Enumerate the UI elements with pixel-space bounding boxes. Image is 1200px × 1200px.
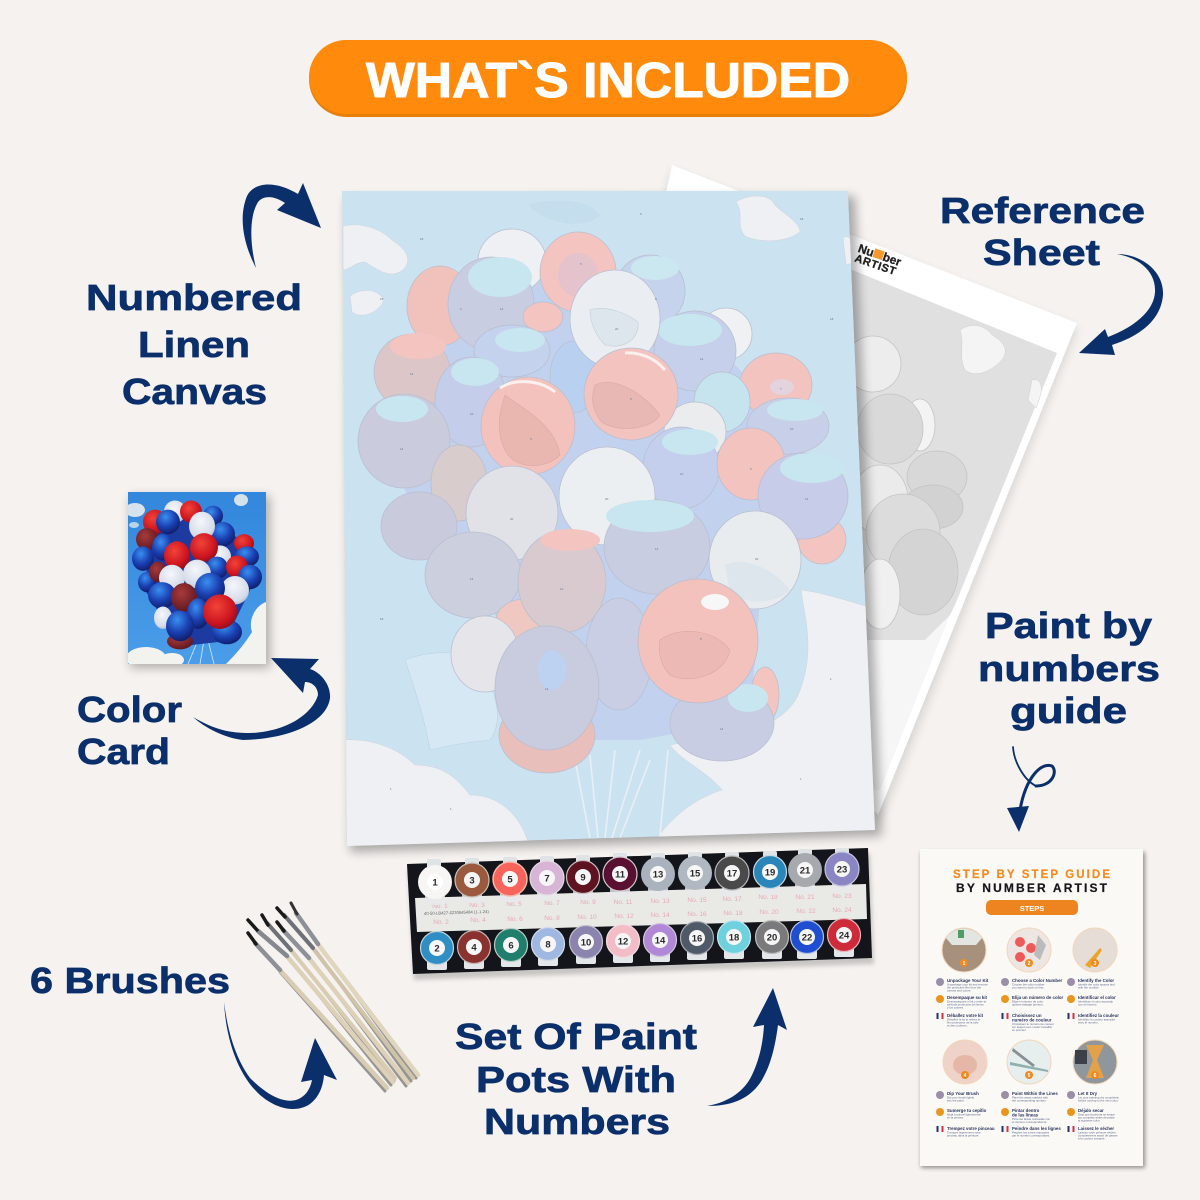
step 3 text: con el número. — [1078, 1002, 1097, 1006]
pot labels: No. 14 — [650, 912, 670, 919]
step 1 text: canvas and colors. — [947, 988, 971, 992]
step 4 text: Dip your brush lightly — [947, 1096, 975, 1100]
sheet logo: ARTIST — [853, 253, 898, 278]
bottom row pots: 12 — [618, 936, 628, 948]
step 5 text: Paint the areas marked with — [1012, 1096, 1048, 1100]
bottom row pots: 4 — [471, 942, 477, 954]
step 4 text — [947, 1091, 995, 1138]
numbered linen canvas — [342, 191, 880, 850]
step 1 text: película protectora del lienzo — [947, 1002, 984, 1006]
step 2 text: you want to work on first. — [1012, 986, 1044, 990]
canvas numbers: 20 — [605, 497, 609, 501]
step 5 text: Peignez les zones marquées — [1012, 1130, 1050, 1134]
pot labels: No. 5 — [506, 901, 522, 908]
canvas numbers: 12 — [410, 372, 414, 376]
brush 3 — [262, 915, 395, 1078]
step 5 text: el número correspondiente. — [1012, 1120, 1047, 1124]
canvas numbers: 18 — [420, 237, 424, 241]
step 5 text: the corresponding number. — [1012, 1098, 1047, 1102]
top row pots: 13 — [653, 870, 663, 880]
label: paint by numbers guide: guide — [1010, 690, 1127, 731]
step 6 text: al siguiente color. — [1078, 1118, 1101, 1122]
step 4 text: into the paint. — [947, 1098, 965, 1102]
canvas numbers: 14 — [805, 497, 809, 501]
step 2 text: Choisissez le numéro de couleur — [1012, 1022, 1054, 1026]
guide poster: BY NUMBER ARTIST — [956, 881, 1108, 895]
sheet logo: ber — [881, 250, 903, 269]
pot labels: No. 1 — [432, 903, 448, 910]
canvas numbers: 6 — [640, 212, 642, 216]
card balloons — [132, 500, 262, 649]
canvas numbers: 14 — [470, 577, 474, 581]
label: numbered linen canvas: Numbered — [86, 277, 302, 318]
step 5 text — [1012, 1091, 1061, 1138]
canvas numbers: 1 — [800, 777, 802, 781]
step 4 text: pinceau dans la peinture. — [947, 1134, 979, 1138]
guide poster: 4 — [964, 1073, 967, 1079]
bottom row pots: 6 — [508, 940, 514, 952]
pot labels: No. 12 — [614, 913, 634, 920]
step 1 text: y los colores. — [947, 1006, 964, 1010]
guide poster: STEPS — [1020, 904, 1044, 913]
pot labels: No. 9 — [580, 899, 596, 906]
canvas numbers: 5 — [750, 467, 752, 471]
bottom row pots — [420, 918, 860, 970]
balloon cluster backing — [404, 280, 798, 740]
bottom row pots: 18 — [729, 932, 739, 944]
step 4 text: Sumerge tu cepillo — [947, 1108, 987, 1113]
step 3 text: Identify the Color — [1078, 978, 1114, 983]
canvas numbers: 14 — [655, 547, 659, 551]
step 4 text: Dip Your Brush — [947, 1091, 979, 1096]
batch code: 40-50-LB427-6230645484 (1-1-24) — [424, 909, 490, 916]
canvas numbers: 12 — [560, 587, 564, 591]
top row pots: 19 — [765, 868, 775, 878]
pot labels: No. 4 — [470, 917, 486, 924]
pot labels: No. 15 — [687, 897, 707, 904]
guide poster — [920, 849, 1145, 1168]
top row pots: 17 — [727, 868, 737, 880]
step 3 text — [1078, 978, 1119, 1024]
canvas numbers: 1 — [390, 787, 392, 791]
guide poster: 6 — [1094, 1073, 1097, 1079]
top row pots: 15 — [690, 868, 701, 880]
step 5 text: Paint Within the Lines — [1012, 1091, 1058, 1096]
step 4 text: Moja tu pincel ligeramente — [947, 1112, 981, 1116]
guide poster: 5 — [1028, 1073, 1031, 1079]
step 6 text — [1078, 1091, 1119, 1140]
pot labels: No. 21 — [795, 894, 815, 901]
canvas numbers: 5 — [580, 262, 582, 266]
canvas numbers: 20 — [510, 517, 514, 521]
top row pots: 1 — [432, 878, 438, 888]
label: paint pots: Set Of Paint — [455, 1016, 697, 1057]
canvas numbers: 1 — [830, 677, 832, 681]
bottom row pots: 20 — [767, 932, 777, 944]
step 6 text: Let your painting dry completely — [1078, 1096, 1119, 1100]
sheet clouds — [960, 325, 1041, 408]
canvas numbers: 10 — [790, 427, 794, 431]
step 2 text — [1012, 978, 1064, 1032]
canvas numbers: 1 — [450, 807, 452, 811]
step 4 text: Trempez légèrement votre — [947, 1130, 981, 1134]
step 6 text: before moving to the next color. — [1078, 1098, 1119, 1102]
canvas numbers: 14 — [400, 447, 404, 451]
pot labels: No. 20 — [759, 909, 779, 916]
step 2 text: en premier. — [1012, 1028, 1027, 1032]
canvas numbers: 10 — [680, 472, 684, 476]
pot labels: No. 18 — [723, 910, 743, 917]
canvas numbers: 20 — [615, 327, 619, 331]
brush 5 — [277, 908, 413, 1078]
label: reference sheet: Sheet — [983, 232, 1100, 273]
canvas numbers: 18 — [830, 317, 834, 321]
step 3 text: with the number. — [1078, 986, 1099, 990]
step 2 text: Choose a Color Number — [1012, 978, 1063, 983]
reference sheet — [600, 165, 1077, 822]
label: paint by numbers guide: numbers — [978, 648, 1160, 689]
canvas numbers: 18 — [800, 217, 804, 221]
top row pots: 21 — [800, 866, 811, 876]
label: brushes: 6 Brushes — [30, 960, 230, 1001]
step 6 text: Déjalo secar — [1078, 1108, 1104, 1113]
step 1 text: Unpackage your kit and remove — [947, 982, 988, 986]
step 5 text: Pinte las áreas marcadas con — [1012, 1117, 1050, 1121]
pot labels: No. 16 — [687, 911, 707, 918]
canvas numbers: 18 — [380, 297, 384, 301]
step 6 text: por completo antes de pasar — [1078, 1116, 1115, 1120]
step 3 text: Identifiez la couleur associée — [1078, 1018, 1116, 1022]
label: numbered linen canvas: Canvas — [122, 371, 267, 412]
canvas numbers: 20 — [755, 557, 759, 561]
step number badges — [960, 959, 1099, 1079]
title banner: WHAT`S INCLUDED — [366, 54, 850, 108]
step 1 text: et des couleurs. — [947, 1024, 968, 1028]
canvas numbers: 18 — [380, 617, 384, 621]
top row pots — [418, 848, 859, 905]
pot labels: No. 6 — [507, 916, 523, 923]
step 2 text: quieres trabajar primero. — [1012, 1002, 1044, 1006]
language flags — [936, 978, 1075, 1133]
sheet logo — [853, 241, 903, 279]
step 6 text: Let It Dry — [1078, 1091, 1098, 1096]
label: paint pots: Pots With — [476, 1059, 676, 1100]
arrow: to brushes — [224, 1002, 337, 1109]
top row pots: 7 — [544, 874, 550, 884]
pot labels: No. 3 — [469, 902, 485, 909]
step 5 text: Peindre dans les lignes — [1012, 1126, 1061, 1131]
canvas numbers: 14 — [720, 727, 724, 731]
steps pill — [986, 900, 1078, 915]
canvas clouds — [343, 196, 880, 850]
bottom row pots: 8 — [545, 940, 551, 950]
step 5 text: par le numéro correspondant. — [1012, 1134, 1050, 1138]
arrow: to color card — [193, 658, 330, 740]
canvas numbers: 5 — [530, 437, 532, 441]
bottom row pots: 2 — [434, 944, 440, 954]
label: color card: Color — [77, 689, 182, 730]
step 6 text: Laissez votre peinture sécher — [1078, 1130, 1116, 1134]
step 1 text: Unpackage Your Kit — [947, 978, 989, 983]
label: reference sheet — [940, 190, 1145, 273]
canvas numbers: 14 — [700, 357, 704, 361]
top row pots: 5 — [507, 874, 513, 886]
step 2 text: Elige el número de color — [1012, 1000, 1043, 1004]
canvas numbers: 14 — [500, 307, 504, 311]
sheet logo: Nu — [856, 241, 876, 260]
balloon cluster — [358, 229, 848, 773]
step 1 text: Desempaque su kit — [947, 995, 988, 1000]
brush 6 — [291, 903, 418, 1075]
canvas numbers: 14 — [545, 687, 549, 691]
pot labels: No. 22 — [796, 908, 816, 915]
bottom row pots: 14 — [655, 936, 666, 946]
step 2 text: sur lequel vous voulez travailler — [1012, 1025, 1052, 1029]
title banner — [309, 40, 907, 117]
step 3 text: Identificar el color asociado — [1078, 1000, 1113, 1004]
pot labels — [432, 893, 852, 926]
step 6 text: Laissez le sécher — [1078, 1126, 1114, 1131]
label: color card — [77, 689, 182, 772]
step 6 text: complètement avant de passer — [1078, 1134, 1118, 1138]
pot labels: No. 7 — [544, 900, 560, 907]
label: reference sheet: Reference — [940, 190, 1145, 231]
paint pots strip — [407, 848, 874, 980]
top row pots: 23 — [837, 864, 847, 876]
canvas numbers: 8 — [655, 297, 657, 301]
bottom row pots: 10 — [581, 938, 591, 948]
bottom row pots: 24 — [839, 930, 850, 942]
guide poster: 2 — [1028, 961, 1031, 967]
arrow: to guide — [1007, 747, 1054, 832]
label: paint by numbers guide: Paint by — [985, 605, 1152, 646]
brush 1 — [248, 933, 387, 1088]
canvas numbers: 7 — [780, 387, 782, 391]
step 4 text: Trempez votre pinceau — [947, 1126, 995, 1131]
brush 2 — [248, 920, 393, 1082]
step 6 text: à la couleur suivante. — [1078, 1136, 1106, 1140]
step 4 text: en la pintura. — [947, 1116, 964, 1120]
top row pots: 3 — [469, 876, 475, 886]
canvas numbers — [380, 212, 834, 811]
step 3 text: Identify the color spaces tied — [1078, 982, 1115, 986]
top row pots: 11 — [615, 870, 626, 880]
label: paint by numbers guide — [978, 605, 1160, 731]
pot labels: No. 11 — [614, 899, 633, 906]
color card — [125, 492, 270, 669]
guide poster: 3 — [1094, 961, 1097, 967]
step 3 text: Identificar el color — [1078, 995, 1116, 1000]
pot labels: No. 17 — [722, 896, 742, 903]
step 2 text: Elija un número de color — [1012, 995, 1064, 1000]
balloon strings — [575, 750, 668, 838]
label: color card: Card — [77, 731, 170, 772]
brushes — [248, 903, 418, 1091]
pot labels: No. 10 — [577, 914, 597, 921]
pot labels: No. 2 — [433, 919, 449, 926]
step 1 text: the protective film from the — [947, 986, 981, 990]
label: paint pots: Numbers — [484, 1101, 670, 1142]
pot labels: No. 13 — [650, 898, 670, 905]
canvas numbers: 5 — [630, 397, 632, 401]
step 1 text: Déballez votre kit — [947, 1013, 984, 1018]
brush shadows — [280, 947, 416, 1091]
step 1 text: film protecteur de la toile — [947, 1020, 979, 1024]
top row pots: 9 — [580, 872, 586, 884]
canvas shadow — [346, 196, 882, 852]
canvas numbers: 5 — [700, 637, 702, 641]
pot labels: No. 8 — [544, 915, 560, 922]
step 2 text: numéro de couleur — [1012, 1018, 1052, 1022]
bottom row pots: 16 — [692, 934, 702, 944]
card clouds — [125, 494, 266, 669]
step 6 text: Deja que la pintura se seque — [1078, 1112, 1115, 1116]
canvas numbers: 2 — [460, 307, 462, 311]
pot labels: No. 24 — [832, 907, 852, 914]
label: paint pots — [455, 1016, 697, 1142]
step 3 text: Identifiez la couleur — [1078, 1013, 1119, 1018]
step 2 text: Choose the color number — [1012, 982, 1044, 986]
sheet balloons — [845, 336, 967, 629]
canvas numbers: 10 — [470, 412, 474, 416]
label strip — [415, 884, 867, 932]
guide poster: 1 — [963, 961, 966, 967]
arrow: to canvas — [243, 183, 321, 268]
step 1 text — [947, 978, 989, 1028]
step 5 text: Pintar dentro — [1012, 1108, 1040, 1113]
step 5 text: de las líneas — [1012, 1112, 1039, 1118]
brush 4 — [277, 922, 408, 1083]
arrow: to reference sheet — [1079, 254, 1163, 355]
bottom row pots: 22 — [802, 932, 812, 944]
arrow: to paint pots — [707, 988, 787, 1106]
label: numbered linen canvas: Linen — [138, 324, 250, 365]
step photos — [942, 928, 1117, 1084]
guide heading: STEP BY STEP GUIDE — [953, 869, 1110, 881]
step 2 text: Choisissez un — [1012, 1013, 1042, 1018]
pot labels: No. 23 — [832, 893, 852, 900]
step 3 text: avec le numéro. — [1078, 1020, 1099, 1024]
step 1 text: Desempaquete el kit y retire la — [947, 1000, 986, 1004]
step 1 text: Déballez le kit et retirez le — [947, 1018, 980, 1022]
label: numbered linen canvas — [86, 277, 302, 412]
pot labels: No. 19 — [758, 894, 778, 901]
